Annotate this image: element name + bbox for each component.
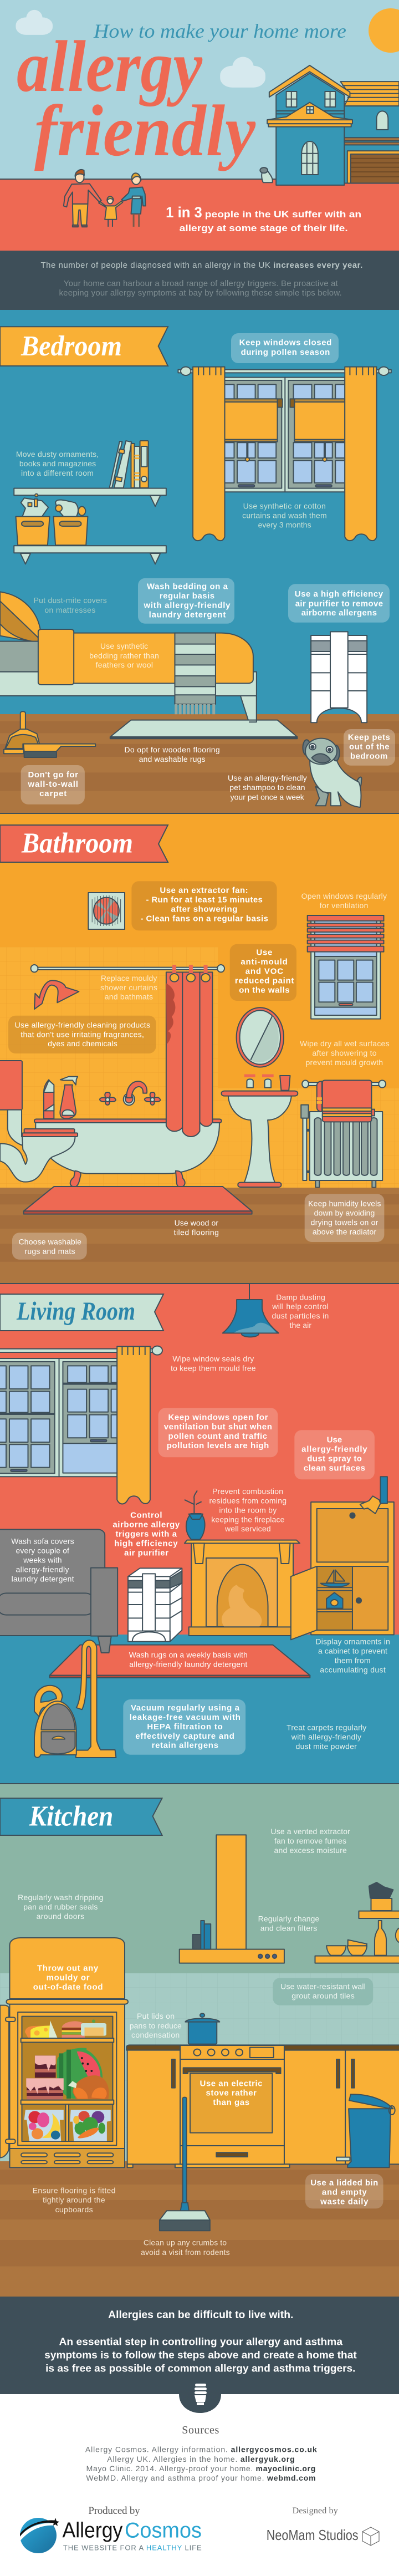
callout: dust spray: dust spray to: [307, 1454, 362, 1464]
callout: vacuum regularly: effectively capture and: [135, 1732, 234, 1741]
tip: dust-mite covers: Put dust-mite covers: [34, 596, 107, 605]
statistic text: allergy at some stage of their life.: [180, 223, 348, 233]
tip: lids on pans: Put lids on: [137, 2012, 175, 2020]
designed by label: Designed by: [293, 2506, 338, 2516]
tip: wood flooring: tiled flooring: [174, 1228, 219, 1236]
callout: wall-to-wall carpet: Don't go for: [28, 770, 78, 780]
callout: humidity: down by avoiding: [314, 1208, 375, 1217]
shower rod: [31, 965, 224, 972]
illustration: cupboards and stove: [126, 2013, 399, 2167]
tip: wipe dry: [300, 1039, 390, 1067]
shower curtain: [166, 965, 212, 1137]
panel: living room: [0, 1283, 399, 1784]
sources heading: Sources: [182, 2424, 219, 2436]
callout: air purifier: Use a high efficiency: [295, 589, 383, 599]
tip: lids on pans: condensation: [131, 2030, 180, 2039]
illustration: pedal bin: [336, 2094, 395, 2167]
tip: dripping pan: [18, 1893, 103, 1921]
callout: wash bedding: regular basis: [160, 592, 214, 601]
sources list: [85, 2445, 317, 2482]
callout: keep windows open: Keep windows open for: [168, 1413, 268, 1422]
tip: move dusty ornaments: into a different room: [21, 469, 94, 477]
banner: Bathroom: Bathroom: [21, 828, 133, 859]
air purifier: [128, 1568, 182, 1642]
tip: vented extractor: Use a vented extractor: [271, 1827, 350, 1836]
striped throw: [175, 633, 216, 714]
fridge food: [24, 2019, 111, 2141]
panel: dark introduction band: [0, 251, 399, 310]
cistern and toilet: [0, 1061, 78, 1182]
tip: change filters: and clean filters: [260, 1923, 317, 1932]
banner: Living Room: [0, 1294, 163, 1331]
tip: window seals: [171, 1355, 256, 1373]
books: [109, 441, 149, 488]
title line: friendly: friendly: [34, 90, 255, 171]
illustration: vacuum cleaner: [34, 1640, 116, 1758]
callout: anti-mould paint: anti-mould: [241, 958, 288, 967]
callout: air purifier: air purifier to remove: [295, 599, 383, 608]
callout: cleaning products: Use allergy-friendly cleaning products: [15, 1020, 150, 1029]
callout: vacuum regularly: leakage-free vacuum with: [130, 1713, 241, 1722]
logo: NeoMam Studios: NeoMam Studios: [267, 2527, 359, 2543]
banner: Bathroom: [0, 825, 168, 862]
callout: air purifier: airborne allergens: [301, 608, 377, 618]
tip: synthetic or cotton curtains: Use synthetic or cotton: [243, 501, 326, 510]
intro text: keeping your allergy symptoms at bay by following these simple tips below.: [59, 288, 342, 298]
tip: synthetic or cotton curtains: [242, 501, 327, 529]
tip: dust-mite covers: on mattresses: [44, 605, 95, 614]
tip: synthetic or cotton curtains: curtains and wash them: [242, 511, 327, 520]
callout: washable rugs: rugs and mats: [25, 1246, 75, 1255]
tip: move dusty ornaments: Move dusty ornaments,: [16, 450, 99, 459]
bedside rug: [110, 720, 297, 739]
tip: damp dusting: dust particles in: [272, 1311, 329, 1320]
tip: wood flooring: Use wood or: [175, 1218, 218, 1227]
callout: vacuum regularly: Vacuum regularly using a: [131, 1703, 240, 1713]
sources list: Allergy UK. Allergies in the home. allergyuk.org: [107, 2455, 295, 2463]
tip: wash rugs: Wash rugs on a weekly basis with: [129, 1650, 248, 1659]
callout: keep windows open: [158, 1408, 278, 1457]
callout: keep windows closed: Keep windows closed: [239, 338, 331, 348]
stove: [180, 2045, 284, 2164]
subtitle: How to make your home more: [93, 20, 346, 42]
tip: wash rugs: [129, 1650, 248, 1669]
tip: wash sofa covers: [11, 1536, 74, 1583]
callout: wash bedding: laundry detergent: [149, 610, 226, 620]
tip: display ornaments: accumulating dust: [320, 1666, 386, 1674]
tip: wash sofa covers: laundry detergent: [12, 1574, 74, 1583]
callout: electric stove: [200, 2079, 263, 2107]
callout: wall grout: [273, 1978, 373, 2005]
tip: damp dusting: will help control: [272, 1302, 329, 1311]
panel: bedroom: [0, 310, 399, 814]
living room rug: [50, 1645, 310, 1678]
intro statement: The number of people diagnosed with an allergy in the UK increases every year.: [40, 261, 362, 270]
fridge shelves: [21, 2038, 114, 2141]
curtain rod: [178, 367, 391, 375]
sources list: WebMD. Allergy and asthma proof your home. webmd.com: [86, 2473, 316, 2482]
callout: dust spray: clean surfaces: [304, 1464, 365, 1473]
logo: Allergy Cosmos: THE WEBSITE FOR A HEALTHY LIFE: [63, 2543, 202, 2552]
illustration: shelf, plant, bowls and bottle: [315, 1882, 399, 1963]
callout: throw out food: mouldy or: [47, 1973, 90, 1983]
tip: fitted flooring: cupboards: [55, 2205, 93, 2214]
tip: replace mouldy curtains: and bathmats: [105, 992, 153, 1001]
tip: wash sofa covers: allergy-friendly: [16, 1565, 69, 1574]
tip: wipe dry: Wipe dry all wet surfaces: [300, 1039, 390, 1048]
illustration: radiator and towel: [301, 1080, 386, 1188]
produced by label: Produced by: [88, 2505, 140, 2517]
banner: Bedroom: [0, 327, 168, 366]
tip: wipe dry: prevent mould growth: [306, 1058, 383, 1067]
panel: closing message: [0, 2297, 399, 2413]
tip: replace mouldy curtains: shower curtains: [100, 983, 157, 992]
tip: wood flooring: [174, 1218, 219, 1236]
callout: wash bedding: Wash bedding on a: [147, 582, 228, 592]
roller blinds: [224, 399, 345, 461]
illustration: house with garage: [260, 65, 399, 185]
callout: humidity: drying towels on or: [311, 1218, 378, 1226]
sources list: Allergy Cosmos. Allergy information. allergycosmos.co.uk: [85, 2445, 317, 2454]
intro text: Your home can harbour a broad range of allergy triggers. Be proactive at: [64, 279, 339, 288]
tip: lids on pans: [130, 2012, 182, 2039]
callout: wall-to-wall carpet: carpet: [39, 789, 66, 798]
tip: clean up crumbs: [141, 2238, 230, 2257]
statistic text: 1 in 3: [166, 204, 202, 221]
baskets: [16, 517, 88, 545]
tip: damp dusting: Damp dusting: [276, 1293, 325, 1302]
closing text: [44, 2335, 357, 2374]
callout: cleaning products: dyes and chemicals: [48, 1039, 117, 1048]
tip: wooden flooring: Do opt for wooden flooring: [124, 745, 220, 754]
tip: display ornaments: them from: [335, 1656, 371, 1665]
tip: vented extractor: fan to remove fumes: [274, 1836, 346, 1845]
callout: humidity: Keep humidity levels: [308, 1199, 381, 1208]
tip: window seals: to keep them mould free: [171, 1364, 256, 1373]
illustration: shelves with books and baskets: [14, 441, 166, 564]
callout: wall grout: grout around tiles: [291, 1992, 355, 2000]
callout: wall-to-wall carpet: wall-to-wall: [27, 780, 78, 789]
callout: lidded bin: Use a lidded bin: [310, 2178, 378, 2187]
tip: wash sofa covers: Wash sofa covers: [11, 1536, 74, 1545]
tip: display ornaments: a cabinet to prevent: [318, 1647, 387, 1656]
tip: dripping pan: around doors: [37, 1912, 84, 1921]
panel: coral statistic band: [0, 65, 399, 251]
callout: humidity: above the radiator: [313, 1227, 376, 1236]
logo: Allergy Cosmos: Cosmos: [125, 2519, 202, 2543]
tip: dripping pan: pan and rubber seals: [23, 1902, 98, 1911]
callout: control airborne triggers: airborne allergy: [112, 1520, 180, 1530]
panel: kitchen: [0, 1784, 399, 2297]
banner: Bedroom: Bedroom: [21, 330, 122, 362]
statistic text: people in the UK suffer with an: [205, 209, 361, 220]
tip: dust-mite covers: [34, 596, 107, 614]
callout: keep pets out: [344, 729, 395, 766]
statistic text: [166, 204, 361, 233]
callout: dust spray: Use: [327, 1435, 342, 1444]
callout: lidded bin: [305, 2174, 383, 2208]
icon: pendant lamp: [223, 1284, 279, 1337]
icon: sun: [369, 8, 399, 53]
callout: electric stove: stove rather: [206, 2088, 257, 2098]
sofa: [0, 1529, 117, 1653]
tip: damp dusting: [272, 1293, 329, 1330]
closing heading: Allergies can be difficult to live with.: [108, 2309, 293, 2321]
illustration: mirror: [237, 1007, 284, 1067]
tip: damp dusting: the air: [290, 1321, 311, 1330]
tip: open windows: Open windows regularly: [301, 892, 387, 900]
tip: change filters: Regularly change: [258, 1914, 320, 1923]
tip: synthetic bedding: Use synthetic: [100, 642, 148, 650]
icon: clouds: [16, 10, 265, 88]
tip: window seals: Wipe window seals dry: [172, 1355, 254, 1363]
callout: humidity: [305, 1194, 384, 1242]
callout: air purifier: [288, 584, 390, 623]
tab with light bulb: [179, 2384, 221, 2413]
callout: washable rugs: Choose washable: [19, 1237, 81, 1246]
tip: display ornaments: [315, 1637, 390, 1674]
illustration: broom: [160, 2098, 210, 2231]
illustration: window with curtains and blinds: [178, 367, 391, 541]
illustration: extractor hood: [180, 1835, 284, 1963]
illustration: air purifier: [311, 632, 367, 722]
tip: wooden flooring: [124, 745, 220, 763]
tip: lids on pans: pans to reduce: [130, 2021, 182, 2030]
tip: replace mouldy curtains: [100, 974, 157, 1001]
vase: [186, 1514, 205, 1540]
tip: combustion residues: [209, 1486, 287, 1533]
callout: extractor fan: - Clean fans on a regular basis: [140, 914, 268, 924]
tip: display ornaments: Display ornaments in: [315, 1637, 390, 1646]
tip: synthetic bedding: bedding rather than: [89, 651, 159, 660]
tip: pet shampoo: pet shampoo to clean: [229, 783, 305, 792]
closing text: An essential step in controlling your allergy and asthma: [59, 2335, 343, 2347]
tip: wipe dry: after showering to: [312, 1048, 377, 1057]
closing text: symptoms is to follow the steps above and create a home that: [44, 2349, 357, 2360]
curtains: [193, 367, 377, 541]
callout: control airborne triggers: [112, 1511, 180, 1558]
callout: electric stove: than gas: [213, 2098, 249, 2107]
fireplace: [185, 1540, 300, 1636]
tip: move dusty ornaments: [16, 450, 99, 477]
callout: anti-mould paint: reduced paint: [235, 976, 294, 986]
callout: control airborne triggers: triggers with a: [115, 1530, 177, 1539]
bathroom floor: [0, 1188, 399, 1284]
callout: keep windows closed: [231, 333, 339, 363]
callout: keep windows open: ventilation but shut when: [164, 1422, 272, 1432]
tip: treat carpets: with allergy-friendly: [291, 1733, 361, 1742]
tip: pet shampoo: [228, 773, 307, 801]
illustration: rug, sofa, purifier, fireplace and cabinet: [0, 1502, 394, 1678]
tip: combustion residues: well serviced: [224, 1524, 271, 1533]
illustration: family holding hands: [64, 170, 146, 227]
bathmat: [24, 1187, 252, 1214]
closing text: is as free as possible of common allergy and asthma triggers.: [45, 2362, 355, 2374]
tip: treat carpets: Treat carpets regularly: [287, 1723, 366, 1732]
callout: keep windows closed: during pollen season: [241, 348, 330, 357]
illustration: basin: [222, 1076, 298, 1187]
icon: extractor fan: [88, 893, 125, 929]
callout: cleaning products: [8, 1016, 156, 1053]
tip: synthetic or cotton curtains: every 3 months: [258, 520, 311, 529]
callout: keep pets out: out of the: [349, 742, 390, 752]
callout: wash bedding: with allergy-friendly: [143, 601, 231, 610]
tip: replace mouldy curtains: Replace mouldy: [101, 974, 157, 982]
illustration: fridge: [0, 1938, 128, 2167]
illustration: bath, shower and toilet: [0, 965, 224, 1187]
callout: vacuum regularly: [123, 1699, 245, 1755]
cleaning bottles: [44, 1077, 78, 1118]
panel: header sky and title: [0, 0, 399, 179]
callout: anti-mould paint: on the walls: [239, 986, 290, 995]
callout: throw out food: [33, 1964, 103, 1992]
callout: throw out food: Throw out any: [37, 1964, 99, 1973]
illustration: dustpan and brush: [4, 711, 95, 757]
tip: wash rugs: allergy-friendly laundry detergent: [129, 1660, 247, 1669]
callout: keep pets out: bedroom: [350, 752, 387, 761]
tip: combustion residues: keeping the fireplace: [211, 1515, 285, 1524]
toys: [21, 494, 85, 517]
callout: dust spray: allergy-friendly: [301, 1445, 367, 1454]
callout: lidded bin: and empty: [322, 2188, 367, 2197]
illustration: dust spray and cloth: [185, 1477, 387, 1519]
callout: control airborne triggers: Control: [130, 1511, 162, 1520]
shower head: [34, 980, 79, 1009]
tip: dripping pan: Regularly wash dripping: [18, 1893, 103, 1902]
callout: washable rugs: [12, 1233, 87, 1260]
callout: extractor fan: after showering: [171, 905, 237, 914]
logo: Allergy Cosmos: Allergy: [62, 2519, 123, 2543]
mother: [121, 173, 146, 227]
callout: extractor fan: Use an extractor fan:: [160, 886, 248, 895]
callout: dust spray: [294, 1430, 375, 1479]
tip: change filters: [258, 1914, 320, 1932]
tip: move dusty ornaments: books and magazines: [19, 459, 96, 468]
callout: wall grout: Use water-resistant wall: [280, 1982, 366, 1990]
fridge vents: [9, 2149, 125, 2167]
tip: clean up crumbs: avoid a visit from rodents: [141, 2248, 230, 2257]
tip: vented extractor: [271, 1827, 350, 1855]
illustration: window with slatted blind: [308, 915, 383, 1019]
tip: treat carpets: dust mite powder: [296, 1742, 357, 1750]
callout: wall-to-wall carpet: [21, 765, 85, 805]
tip: fitted flooring: [33, 2186, 115, 2214]
callout: vacuum regularly: HEPA filtration to: [147, 1722, 223, 1732]
tip: synthetic bedding: feathers or wool: [96, 660, 153, 669]
callout: control airborne triggers: high efficiency: [114, 1539, 178, 1549]
callout: anti-mould paint: [230, 944, 296, 1001]
callout: anti-mould paint: and VOC: [245, 967, 283, 976]
tip: synthetic bedding: [89, 642, 159, 669]
panel: bathroom: [0, 814, 399, 1284]
callout: throw out food: out-of-date food: [33, 1983, 103, 1992]
callout: electric stove: Use an electric: [200, 2079, 263, 2088]
tip: wash sofa covers: weeks with: [23, 1555, 62, 1564]
tip: open windows: [301, 892, 387, 910]
callout: keep windows open: pollen count and traffic: [168, 1432, 267, 1441]
tip: clean up crumbs: Clean up any crumbs to: [144, 2238, 227, 2247]
callout: vacuum regularly: retain allergens: [152, 1741, 218, 1750]
tip: combustion residues: into the room by: [219, 1506, 277, 1515]
illustration: living room window and curtain: [0, 1346, 162, 1504]
callout: wash bedding: [138, 578, 234, 624]
tip: wash sofa covers: every couple of: [16, 1546, 69, 1555]
tip: pet shampoo: Use an allergy-friendly: [228, 773, 307, 782]
illustration: pug dog: [303, 739, 362, 807]
callout: control airborne triggers: air purifier: [124, 1549, 168, 1558]
panel: sources and credits: [0, 2413, 399, 2576]
callout: keep pets out: Keep pets: [348, 733, 390, 742]
bath taps: [100, 1081, 160, 1105]
tip: open windows: for ventilation: [320, 901, 368, 910]
callout: keep windows open: pollution levels are high: [167, 1441, 269, 1450]
callout: lidded bin: waste daily: [320, 2197, 369, 2207]
tip: wooden flooring: and washable rugs: [139, 755, 206, 763]
tip: combustion residues: residues from coming: [209, 1496, 287, 1505]
illustration: bed with throw: [0, 592, 297, 739]
child: [99, 196, 122, 227]
tip: vented extractor: and excess moisture: [274, 1846, 347, 1855]
callout: extractor fan: [131, 881, 277, 930]
banner: Kitchen: Kitchen: [29, 1801, 113, 1832]
logo: Allergy Cosmos: [20, 2518, 202, 2553]
pot: [185, 2013, 219, 2044]
father: [64, 170, 101, 227]
banner: Kitchen: [0, 1798, 162, 1835]
tip: treat carpets: [287, 1723, 366, 1750]
title line: allergy: allergy: [17, 26, 202, 107]
callout: cleaning products: that don't use irritating fragrances,: [21, 1030, 144, 1038]
callout: anti-mould paint: Use: [256, 948, 272, 958]
callout: extractor fan: - Run for at least 15 minutes: [146, 895, 263, 905]
tip: fitted flooring: Ensure flooring is fitted: [33, 2186, 115, 2195]
bathtub: [35, 1123, 219, 1174]
tip: fitted flooring: tightly around the: [43, 2196, 105, 2205]
display cabinet: [291, 1502, 394, 1640]
small dog sitting: [260, 167, 273, 182]
banner: Living Room: Living Room: [16, 1297, 135, 1326]
tip: pet shampoo: your pet once a week: [231, 792, 305, 801]
tip: combustion residues: Prevent combustion: [212, 1486, 283, 1495]
sources list: Mayo Clinic. 2014. Allergy-proof your home. mayoclinic.org: [86, 2464, 315, 2473]
intro text: [59, 279, 342, 298]
